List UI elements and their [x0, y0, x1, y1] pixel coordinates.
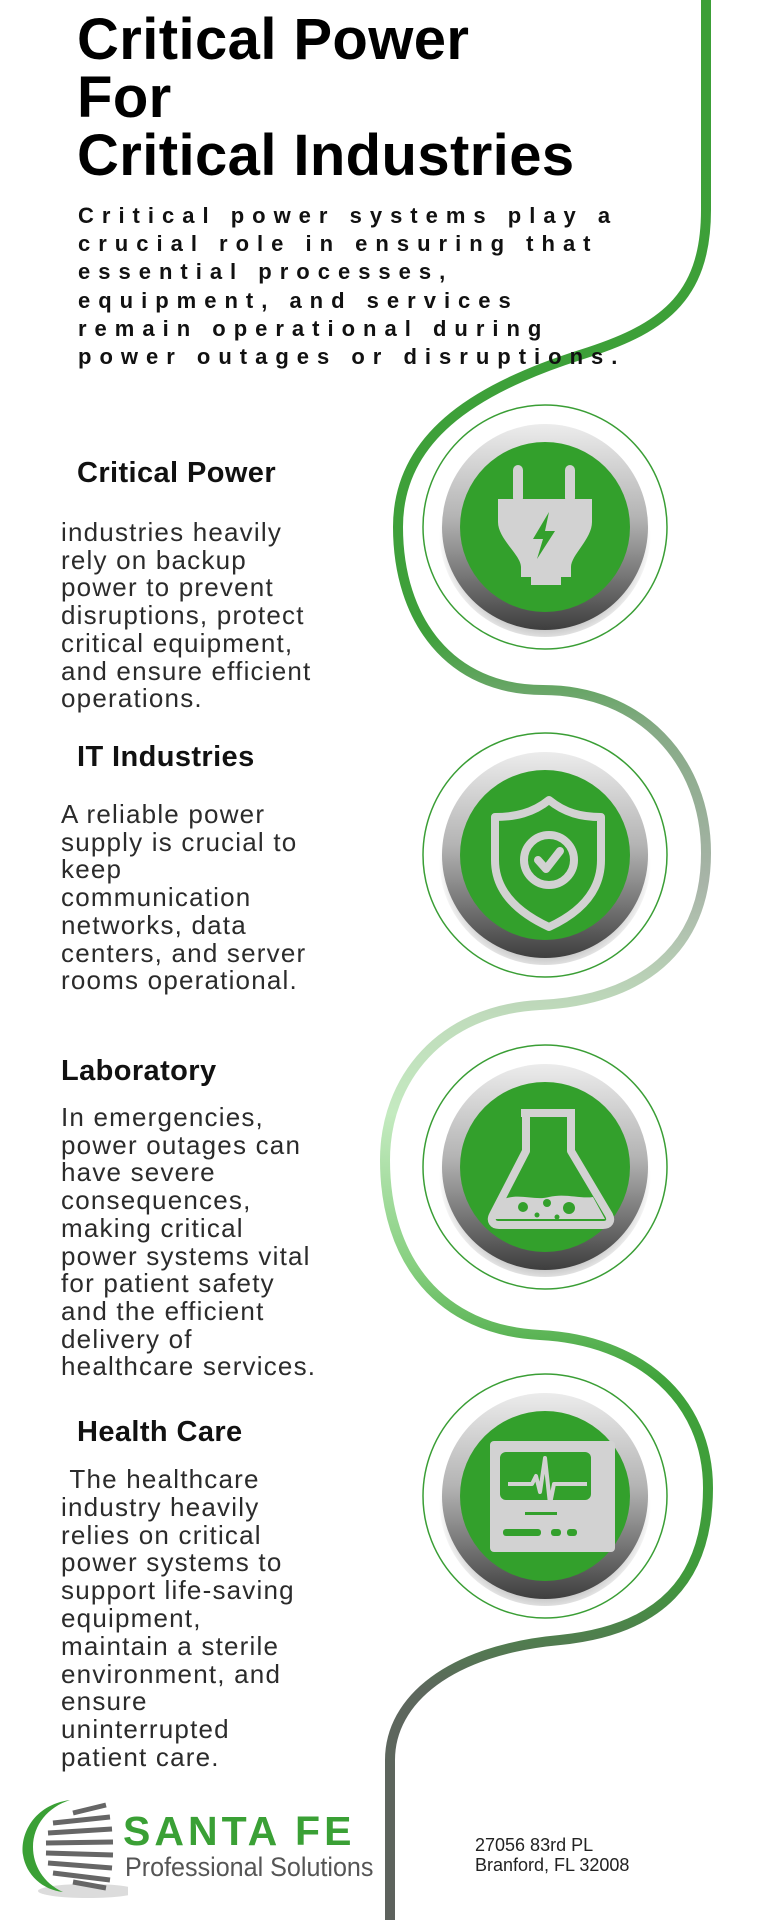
title: Critical Power — [77, 7, 469, 72]
text: Health Care: industry heavily — [61, 1492, 259, 1522]
heading: Critical Power: Critical Power — [77, 457, 276, 489]
text: Critical Power: operations. — [61, 683, 203, 713]
text: Laboratory — [61, 1102, 316, 1381]
text: Critical Power: rely on backup — [61, 545, 247, 575]
text: Laboratory: for patient safety — [61, 1268, 275, 1298]
logo: Santa Fe Professional Solutions — [22, 1800, 373, 1898]
text: IT Industries: centers, and server — [61, 938, 306, 968]
text: Laboratory: consequences, — [61, 1185, 252, 1215]
title: Critical Industries — [77, 123, 575, 188]
subtitle: equipment, and services — [78, 288, 519, 313]
text: Laboratory: healthcare services. — [61, 1351, 316, 1381]
logo mark — [22, 1800, 128, 1898]
heading: Health Care: Health Care — [77, 1416, 243, 1448]
text: IT Industries: keep — [61, 854, 122, 884]
text: Laboratory: power outages can — [61, 1130, 301, 1160]
text: Health Care: ensure — [61, 1686, 148, 1716]
text: IT Industries: rooms operational. — [61, 965, 298, 995]
text: Health Care: environment, and — [61, 1659, 281, 1689]
text: Critical Power: power to prevent — [61, 572, 274, 602]
subtitle: crucial role in ensuring that — [78, 231, 599, 256]
subtitle — [78, 203, 625, 369]
text: IT Industries: supply is crucial to — [61, 827, 297, 857]
text: Health Care: power systems to — [61, 1547, 282, 1577]
icon: flask — [422, 1044, 668, 1290]
text: Laboratory: making critical — [61, 1213, 244, 1243]
text: Health Care — [61, 1464, 295, 1772]
subtitle: remain operational during — [78, 316, 549, 341]
icon: shield — [422, 732, 668, 978]
address: Branford, FL 32008 — [475, 1855, 629, 1875]
text: Critical Power: industries heavily — [61, 517, 282, 547]
text: Critical Power: critical equipment, — [61, 628, 293, 658]
title: For — [77, 65, 172, 130]
address — [475, 1835, 629, 1875]
text: Critical Power: and ensure efficient — [61, 656, 311, 686]
text: Laboratory: delivery of — [61, 1324, 193, 1354]
title — [77, 7, 575, 188]
text: IT Industries: A reliable power — [61, 799, 265, 829]
text: Critical Power: disruptions, protect — [61, 600, 305, 630]
text: Laboratory: and the efficient — [61, 1296, 265, 1326]
address: 27056 83rd PL — [475, 1835, 593, 1855]
heading: IT Industries: IT Industries — [77, 741, 255, 773]
text: Health Care: equipment, — [61, 1603, 202, 1633]
text: Laboratory: power systems vital — [61, 1241, 311, 1271]
text: Health Care: The healthcare — [69, 1464, 260, 1494]
text: IT Industries: networks, data — [61, 910, 247, 940]
text: Laboratory: In emergencies, — [61, 1102, 264, 1132]
logo text: SANTA FE — [123, 1808, 355, 1854]
text: Health Care: patient care. — [61, 1742, 220, 1772]
text: Critical Power — [61, 517, 311, 713]
subtitle: power outages or disruptions. — [78, 344, 625, 369]
text: Health Care: maintain a sterile — [61, 1631, 279, 1661]
subtitle: essential processes, — [78, 259, 453, 284]
subtitle: Critical power systems play a — [78, 203, 618, 228]
text: IT Industries: communication — [61, 882, 251, 912]
heading: Laboratory: Laboratory — [61, 1055, 216, 1087]
text: Laboratory: have severe — [61, 1157, 216, 1187]
logo subtitle: Professional Solutions — [125, 1852, 373, 1882]
icon: monitor — [422, 1373, 668, 1619]
icon: plug — [422, 404, 668, 650]
text: Health Care: support life-saving — [61, 1575, 295, 1605]
text: Health Care: uninterrupted — [61, 1714, 230, 1744]
text: IT Industries — [61, 799, 306, 995]
text: Health Care: relies on critical — [61, 1520, 262, 1550]
